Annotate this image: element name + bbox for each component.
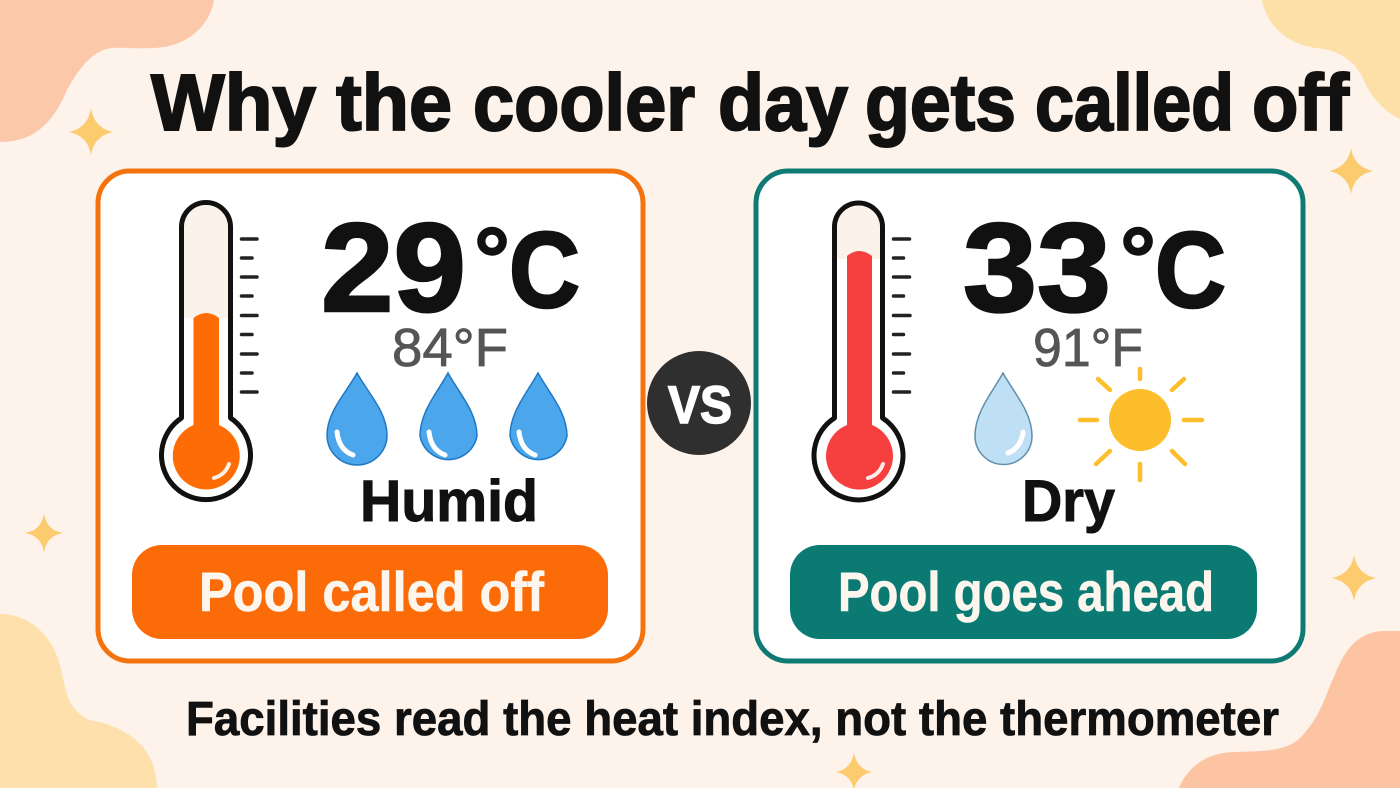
panel: dry day — [756, 171, 1303, 661]
button: Pool called off: Pool called off — [199, 560, 544, 623]
label: Humid: Humid — [360, 469, 538, 534]
icon: thermometer at 33°C — [814, 203, 910, 500]
temperature: 33°C: 33 — [963, 197, 1111, 338]
temperature: 33°C: C — [1155, 209, 1226, 330]
temperature: 29°C: C — [509, 209, 580, 330]
icon: sun — [1080, 369, 1202, 480]
title: called — [1035, 58, 1234, 147]
temperature: 33°C — [963, 197, 1226, 338]
temperature: 29°C — [321, 197, 580, 338]
icon: thermometer at 29°C — [161, 202, 257, 500]
sparkle: right — [1332, 555, 1376, 601]
temperature: 84°F: 84°F — [392, 318, 508, 378]
icon: single pale water drop — [975, 373, 1032, 464]
temperature: 33°C: ° — [1120, 210, 1156, 310]
button: Pool called off — [132, 545, 608, 639]
button: Pool goes ahead: Pool goes ahead — [838, 560, 1214, 623]
title: off — [1252, 58, 1349, 147]
button: Pool goes ahead — [790, 545, 1257, 639]
sparkle: bottom — [836, 753, 872, 788]
title — [151, 58, 1349, 147]
icon: three water drops — [327, 373, 567, 465]
caption: Facilities read the heat index, not the thermometer — [186, 693, 1279, 746]
title: day — [718, 58, 848, 147]
sparkle: left — [25, 513, 63, 553]
title: gets — [865, 58, 1016, 147]
temperature: 91°F: 91°F — [1033, 318, 1143, 378]
temperature: 29°C: ° — [474, 210, 510, 310]
title: Why — [151, 58, 316, 147]
sparkle: top right — [1329, 148, 1373, 194]
title: cooler — [473, 58, 695, 147]
badge: VS: VS — [668, 376, 732, 435]
panel: humid day — [98, 171, 643, 661]
temperature: 29°C: 29 — [321, 197, 466, 338]
title: the — [336, 58, 452, 147]
badge: VS — [647, 351, 751, 455]
sparkle: top left — [69, 108, 113, 155]
label: Dry: Dry — [1022, 469, 1115, 534]
